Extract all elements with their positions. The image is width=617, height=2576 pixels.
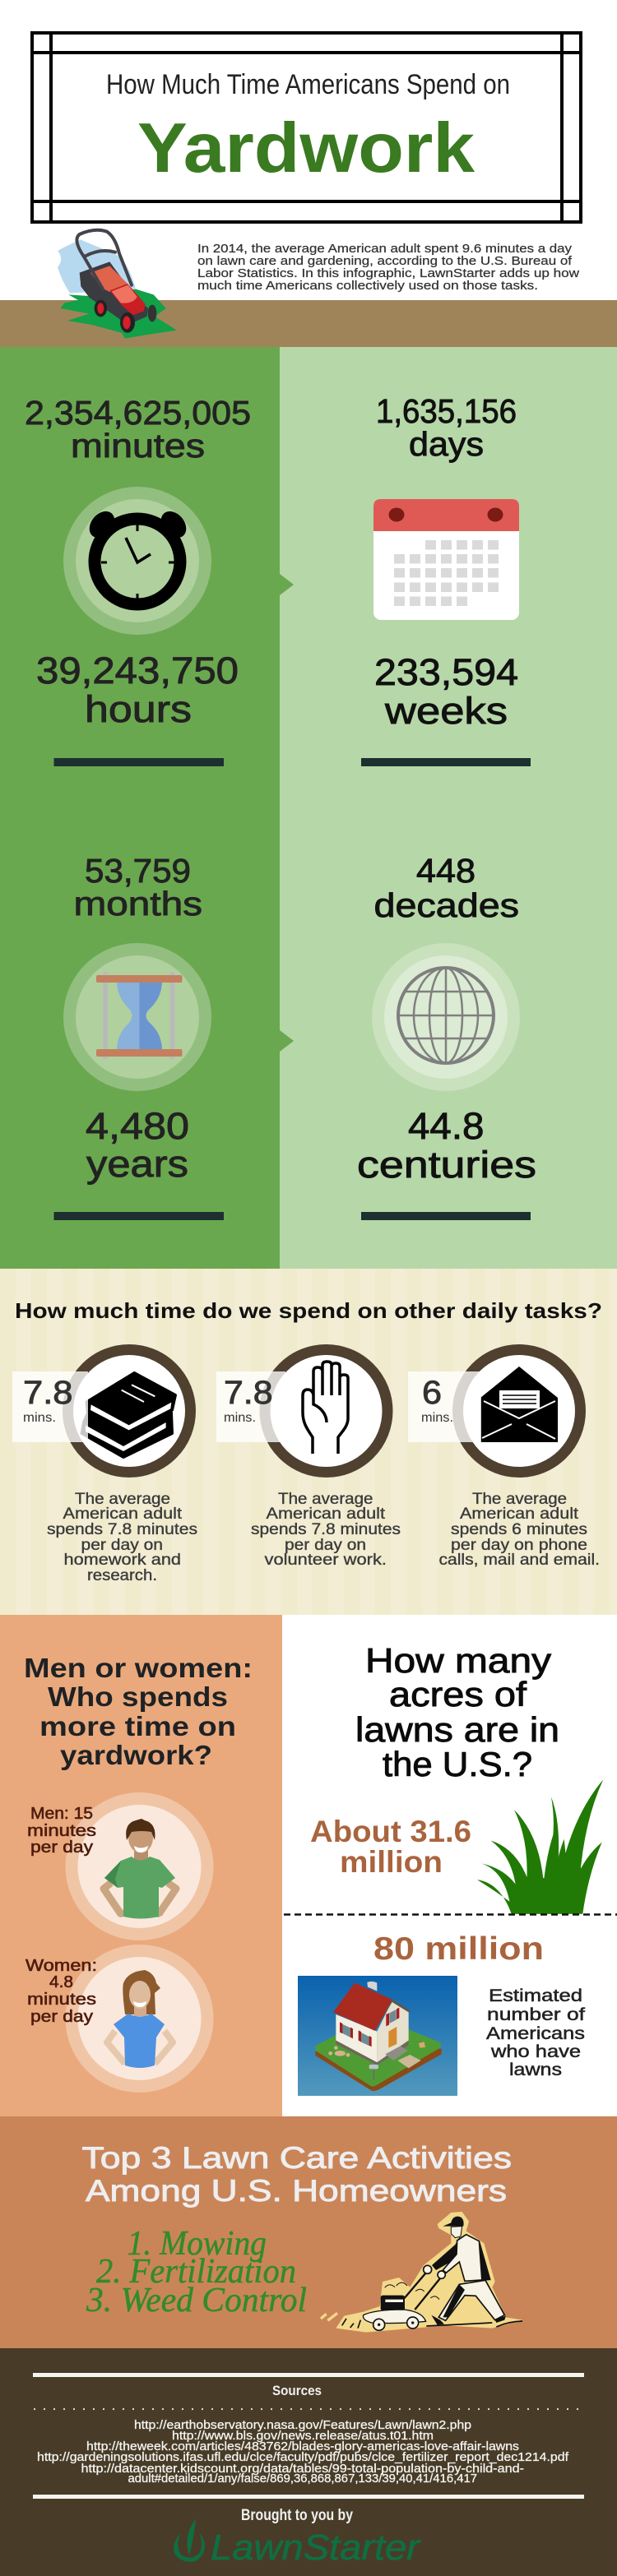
panel: men or women [0, 1615, 282, 2116]
stat: days: 1,635,156 [376, 392, 517, 430]
list of activities: 1. Mowing [127, 2225, 267, 2263]
source links: http://theweek.com/articles/483762/blades-glory-americas-love-affair-lawns [86, 2440, 519, 2453]
caption: Americans with lawns: lawns [509, 2060, 562, 2079]
caption: Americans with lawns: who have [490, 2042, 581, 2061]
heading [24, 1653, 253, 1770]
dotted divider [35, 2408, 582, 2410]
label: women: 4.8 [49, 1973, 73, 1991]
stat: months: months [74, 885, 202, 923]
stat: hours [36, 650, 239, 730]
description: calls, mail and email. [439, 1552, 600, 1569]
icon: calendar [373, 499, 519, 620]
brown ground band [0, 300, 617, 347]
description [439, 1491, 600, 1569]
heading: more time on [39, 1711, 236, 1741]
credit line: Brought to you by [241, 2507, 353, 2524]
right light green column [280, 347, 617, 1269]
intro paragraph: much time Americans collectively used on those tasks. [197, 279, 538, 293]
divider bar [361, 758, 531, 766]
heading [355, 1641, 559, 1783]
icon: house on lawn [298, 1976, 457, 2096]
description: spends 6 minutes [451, 1521, 587, 1538]
description: The average [75, 1491, 170, 1508]
list of activities: 3. Weed Control [86, 2282, 307, 2319]
description: volunteer work. [265, 1552, 387, 1569]
heading: sources: Sources [272, 2383, 322, 2398]
striped background [0, 1269, 617, 1615]
icon: lawn mower [58, 230, 177, 339]
value box: 6 mins: mins. [421, 1411, 453, 1425]
panel: header [0, 31, 617, 347]
stat: days [376, 392, 517, 463]
stat: decades: decades [373, 886, 519, 924]
stat: hours: hours [85, 688, 192, 730]
stat: decades [373, 852, 519, 924]
label: men: minutes [27, 1822, 96, 1840]
stat: centuries: 44.8 [408, 1105, 484, 1147]
intro paragraph: on lawn care and gardening, according to the U.S. Bureau of [197, 254, 573, 268]
label: men: per day [30, 1838, 93, 1857]
stat: acres: About 31.6 [310, 1815, 471, 1848]
stat: hours: 39,243,750 [36, 650, 239, 691]
stat: years: years [86, 1143, 188, 1185]
stat: months [74, 852, 202, 923]
heading: How many [365, 1641, 551, 1680]
stat: centuries: centuries [357, 1144, 536, 1186]
divider bar [361, 1212, 531, 1220]
description: per day on phone [451, 1537, 587, 1554]
list of activities [86, 2225, 307, 2319]
label: women [26, 1957, 97, 2026]
source links: adult#detailed/1/any/false/869,36,868,867,133/39,40,41/416,417 [128, 2472, 477, 2486]
label: women: minutes [27, 1991, 96, 2009]
stat: decades: 448 [416, 852, 476, 890]
label: men [27, 1805, 96, 1857]
label: men: Men: 15 [30, 1805, 93, 1823]
value box: 7.8 mins [216, 1371, 285, 1442]
icon: man mowing [321, 2212, 522, 2333]
description: homework and [64, 1552, 181, 1569]
caption: Americans with lawns: Americans [486, 2024, 585, 2043]
icon: grass tuft [477, 1779, 603, 1914]
intro paragraph: Labor Statistics. In this infographic, LawnStarter adds up how [197, 266, 579, 280]
stat: days: days [409, 425, 484, 463]
icon: hourglass [63, 943, 211, 1091]
stat: weeks: weeks [384, 690, 508, 732]
intro paragraph: In 2014, the average American adult spent 9.6 minutes a day [197, 242, 573, 256]
title: yardwork: Yardwork [137, 109, 476, 187]
caption: Americans with lawns [486, 1986, 585, 2079]
divider bar [54, 758, 224, 766]
dark background [0, 2348, 617, 2576]
panel: other daily tasks [0, 1269, 617, 1615]
description: spends 7.8 minutes [47, 1521, 197, 1538]
panel: time totals [0, 347, 617, 1269]
value box: 6 mins: 6 [422, 1375, 442, 1411]
intro paragraph [197, 242, 579, 293]
description: per day on [81, 1537, 163, 1554]
heading: Men or women: [24, 1653, 253, 1683]
icon: alarm clock [63, 487, 211, 635]
panel: acres of lawns [284, 1641, 617, 2096]
card: volunteer work [216, 1350, 401, 1569]
description: American adult [460, 1505, 579, 1523]
logo: LawnStarter [174, 2518, 422, 2568]
title: how much time: How Much Time Americans Spend on [106, 69, 510, 100]
heading: Top 3 Lawn Care Activities [82, 2141, 512, 2175]
panel: top 3 activities [0, 2116, 617, 2348]
description: per day on [285, 1537, 366, 1554]
heading: lawns are in [355, 1710, 559, 1749]
icon: books [67, 1350, 191, 1472]
panel: sources and credit [0, 2348, 617, 2576]
top rule [33, 2373, 584, 2377]
title frame [30, 31, 582, 224]
description: American adult [267, 1505, 386, 1523]
icon: globe [372, 943, 520, 1091]
stat: years: 4,480 [86, 1105, 189, 1147]
heading [82, 2141, 512, 2208]
orange background [0, 1615, 282, 2116]
stat: acres: million [340, 1845, 443, 1879]
heading: the U.S.? [383, 1745, 532, 1783]
icon: woman [66, 1945, 214, 2093]
stat: acres [310, 1815, 471, 1879]
label: women: Women: [26, 1957, 97, 1975]
heading: acres of [389, 1675, 527, 1713]
dashed divider [284, 1913, 617, 1916]
left green column [0, 347, 280, 1269]
card: phone, mail and email [408, 1350, 600, 1569]
arrow: minutes to days [280, 574, 294, 595]
arrow: months to decades [280, 1030, 294, 1052]
description: American adult [63, 1505, 183, 1523]
description: The average [472, 1491, 567, 1508]
caption: Americans with lawns: number of [487, 2005, 585, 2024]
source links: http://gardeningsolutions.ifas.ufl.edu/clce/faculty/pdf/pubs/clce_fertilizer_report_dec1214.pdf [37, 2450, 569, 2464]
stat: 80 million: 80 million [373, 1931, 544, 1967]
source links: http://earthobservatory.nasa.gov/Features/Lawn/lawn2.php [134, 2418, 471, 2432]
list of activities: 2. Fertilization [96, 2253, 296, 2291]
value box: 7.8 mins: 7.8 [23, 1375, 72, 1411]
bottom rule [33, 2495, 584, 2499]
stat: years [86, 1105, 189, 1185]
icon: raised hand [265, 1350, 387, 1472]
terracotta background [0, 2116, 617, 2348]
value box: 6 mins [408, 1371, 481, 1442]
icon: envelope [457, 1350, 581, 1472]
icon: man [66, 1792, 214, 1940]
heading: Who spends [48, 1681, 228, 1712]
stat: months: 53,759 [85, 852, 191, 890]
caption: Americans with lawns: Estimated [489, 1986, 582, 2005]
divider bar [54, 1212, 224, 1220]
stat: centuries [357, 1105, 536, 1186]
stat: weeks: 233,594 [374, 651, 518, 693]
description [251, 1491, 401, 1569]
value box: 7.8 mins: mins. [224, 1411, 256, 1425]
description [47, 1491, 197, 1584]
heading: yardwork? [60, 1740, 212, 1770]
source links [37, 2418, 569, 2486]
value box: 7.8 mins: mins. [23, 1411, 56, 1425]
card: homework [12, 1350, 197, 1584]
description: research. [87, 1567, 157, 1584]
heading: How much time do we spend on other daily tasks? [15, 1298, 602, 1323]
stat: weeks [374, 651, 518, 732]
stat: minutes [25, 394, 251, 465]
heading: Among U.S. Homeowners [86, 2174, 507, 2208]
value box: 7.8 mins: 7.8 [224, 1375, 273, 1411]
description: The average [278, 1491, 373, 1508]
label: women: per day [30, 2008, 93, 2026]
source links: http://www.bls.gov/news.release/atus.t01.htm [172, 2429, 434, 2443]
value box: 7.8 mins [12, 1371, 88, 1442]
description: spends 7.8 minutes [251, 1521, 401, 1538]
stat: minutes: 2,354,625,005 [25, 394, 251, 432]
source links: http://datacenter.kidscount.org/data/tables/99-total-population-by-child-and- [81, 2462, 524, 2476]
logo: LawnStarter: LawnStarter [211, 2527, 422, 2568]
stat: minutes: minutes [71, 427, 205, 465]
